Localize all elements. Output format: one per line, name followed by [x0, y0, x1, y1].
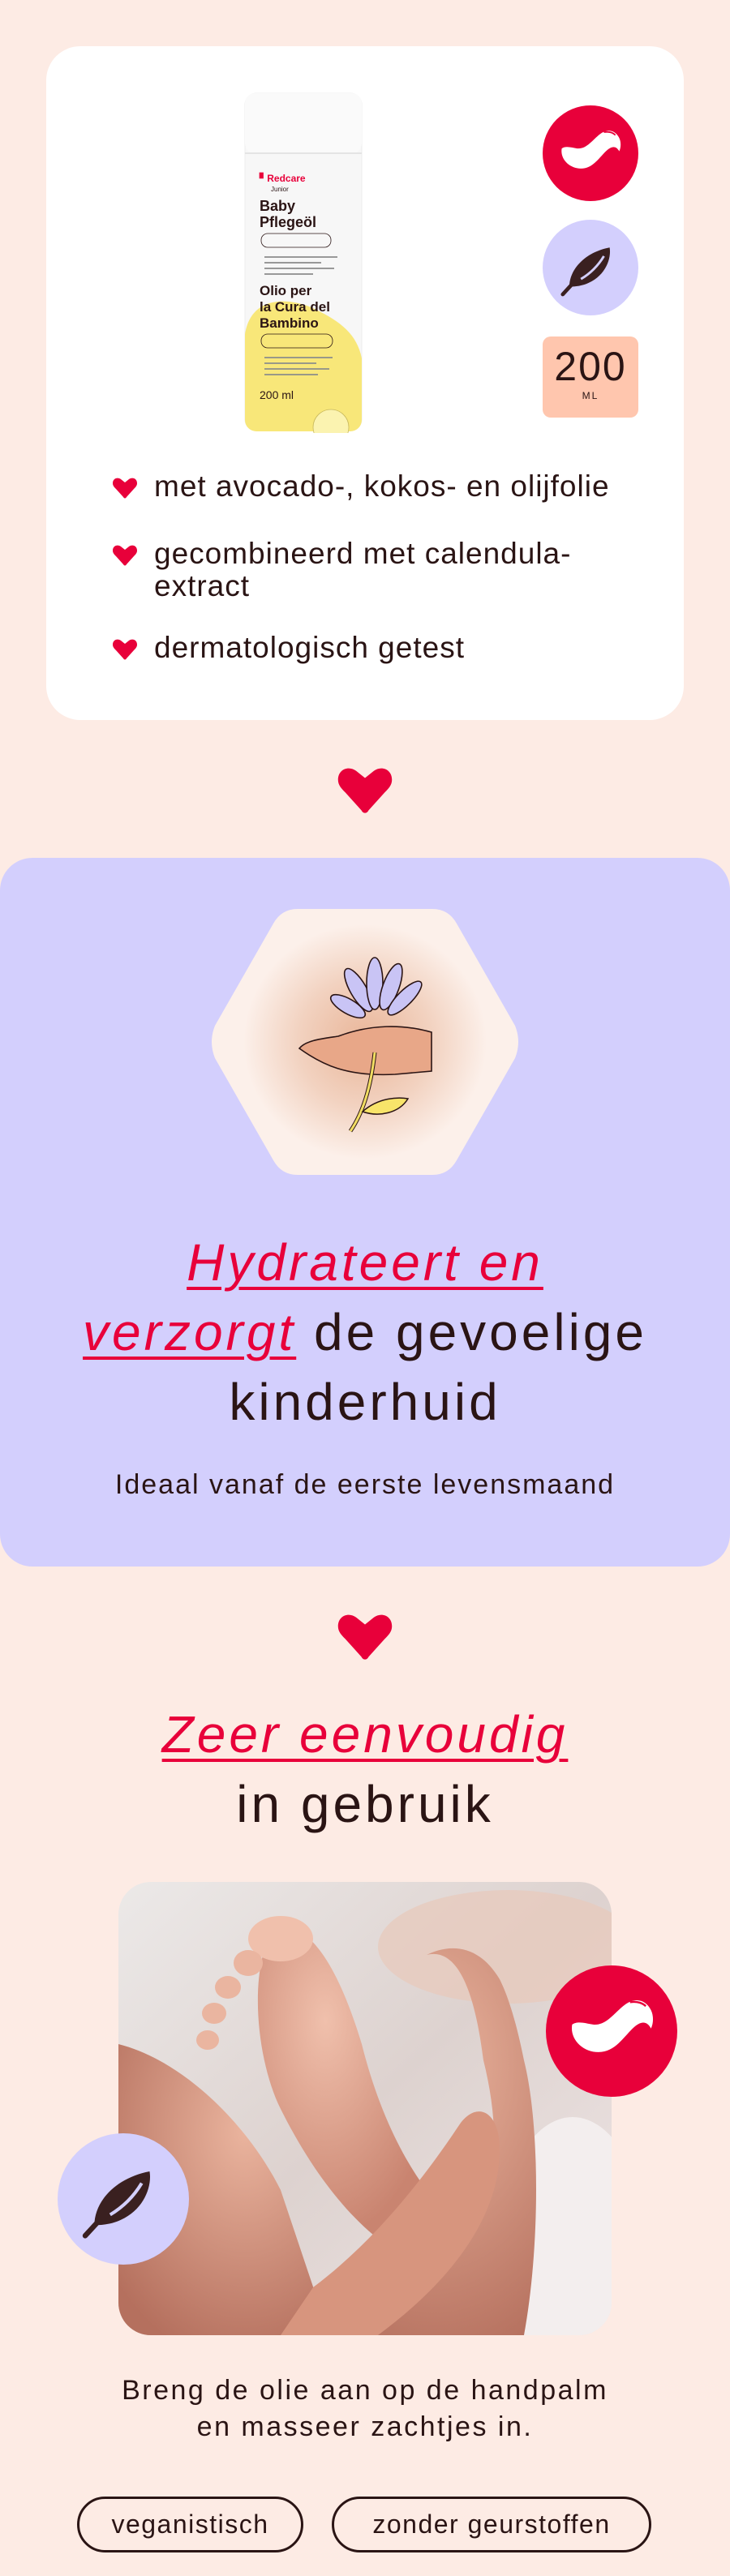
bullet 2: extract	[154, 569, 250, 602]
hexagon illustration	[212, 909, 518, 1175]
icon: red swoosh logo	[543, 105, 638, 201]
heading	[83, 1233, 647, 1431]
badge: 200 ML: ML	[582, 390, 599, 401]
photo: baby foot with hand	[118, 1882, 612, 2335]
pill: veganistisch	[77, 2497, 303, 2552]
heading: usage: Zeer eenvoudig	[162, 1705, 568, 1764]
bullet 3: dermatologisch getest	[154, 631, 465, 664]
bullet 1: met avocado-, kokos- en olijfolie	[154, 469, 610, 503]
bullet 2	[113, 537, 571, 602]
arrow heart 2	[337, 1615, 393, 1660]
heading: kinderhuid	[229, 1373, 501, 1431]
product bottle: Pflegeöl	[260, 214, 316, 230]
product bottle: la Cura del	[260, 299, 330, 315]
instruction text	[122, 2375, 608, 2442]
product bottle: Baby	[260, 198, 295, 214]
icon: feather on photo	[58, 2133, 189, 2265]
product bottle: Junior	[271, 186, 289, 193]
card: product	[46, 46, 684, 720]
product bottle: 200 ml	[260, 388, 294, 401]
heading: usage: in gebruik	[236, 1775, 494, 1833]
icon: red swoosh on photo	[546, 1965, 677, 2097]
icon: feather	[543, 220, 638, 315]
heading: verzorgt de gevoelige	[83, 1303, 647, 1361]
product bottle: Olio per	[260, 283, 312, 298]
instruction text: en masseer zachtjes in.	[197, 2411, 533, 2442]
bullet 2: gecombineerd met calendula-	[154, 537, 571, 570]
arrow heart 1	[337, 769, 393, 813]
product bottle	[245, 92, 362, 433]
badge: 200 ML: 200	[554, 344, 627, 389]
pill: veganistisch: veganistisch	[111, 2510, 269, 2539]
heading: Hydrateert en	[187, 1233, 543, 1292]
heading: usage	[161, 1705, 568, 1833]
pill: zonder geurstoffen: zonder geurstoffen	[372, 2510, 611, 2539]
instruction text: Breng de olie aan op de handpalm	[122, 2375, 608, 2406]
product bottle: ▘Redcare	[259, 172, 306, 184]
badge: 200 ML	[543, 336, 638, 418]
subtitle: Ideaal vanaf de eerste levensmaand	[115, 1469, 615, 1500]
pill: zonder geurstoffen	[332, 2497, 651, 2552]
panel: hydration	[0, 858, 730, 1567]
product bottle: Bambino	[260, 315, 319, 331]
